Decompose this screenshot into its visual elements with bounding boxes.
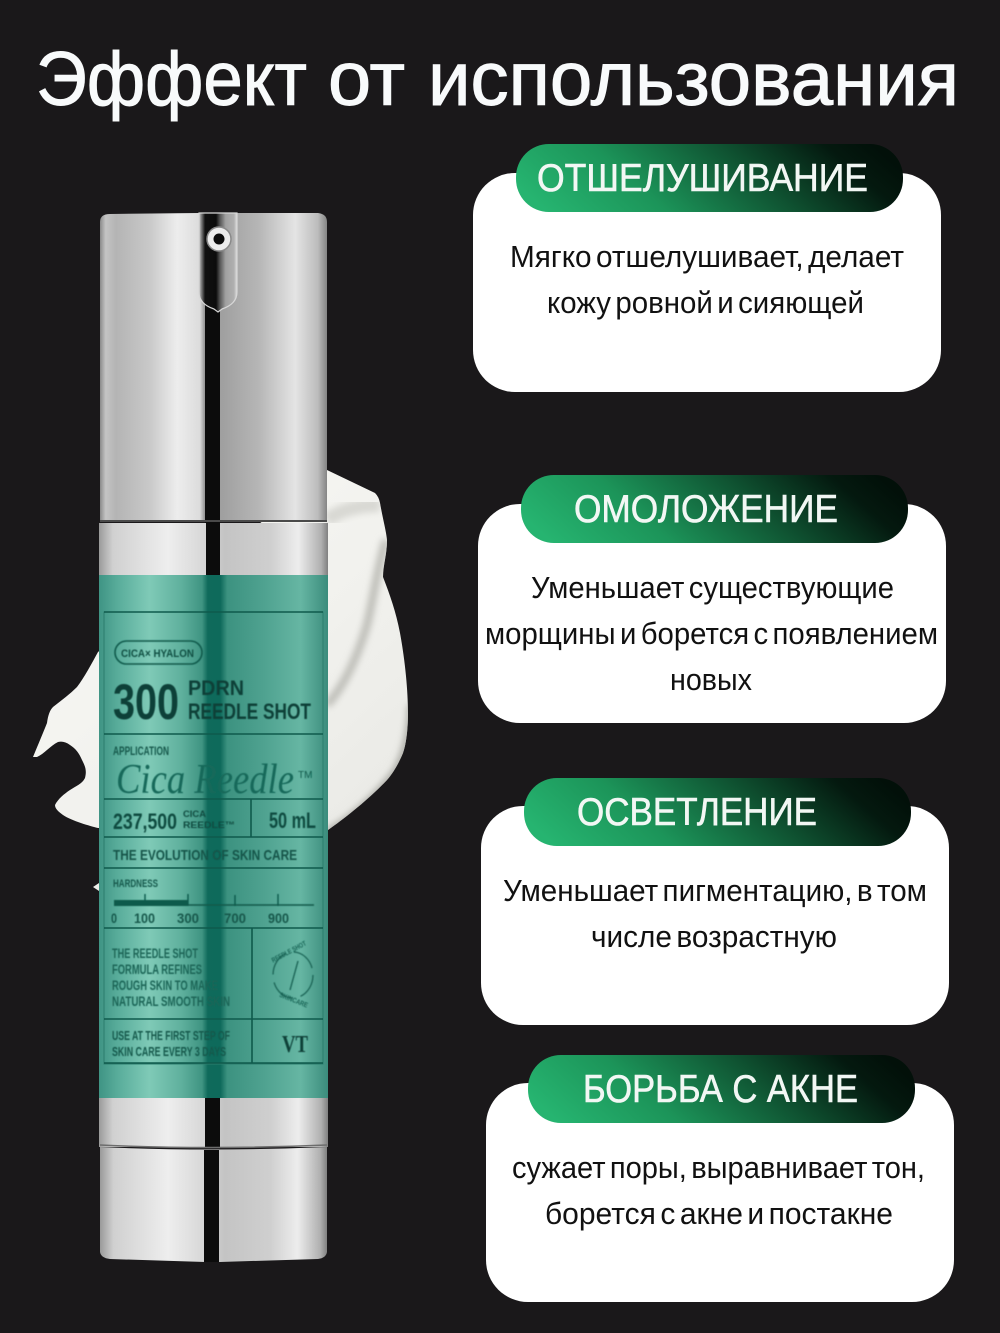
body text — [510, 239, 904, 320]
teal label band — [99, 575, 328, 1100]
panel: brightening — [481, 778, 949, 1025]
heading pill: ОМОЛОЖЕНИЕ — [574, 488, 838, 531]
label: application: TM — [298, 770, 312, 781]
body text: Мягко отшелушивает, делает — [510, 239, 904, 274]
body text: кожу ровной и сияющей — [547, 285, 864, 320]
label: skincare stamp: SKINCARE — [278, 992, 309, 1010]
panel: exfoliation — [473, 144, 941, 392]
body text: числе возрастную — [591, 919, 837, 954]
body text — [503, 873, 927, 954]
body text — [512, 1150, 925, 1231]
card background — [478, 504, 946, 723]
body text — [485, 570, 938, 697]
label: product name: 300 — [113, 674, 179, 730]
label: cica x hyalon badge: CICA× HYALON — [121, 648, 194, 660]
label: description: THE REEDLE SHOT — [112, 946, 199, 961]
label: hardness scale: HARDNESS — [113, 878, 158, 890]
heading pill: ОСВЕТЛЕНИЕ — [577, 791, 817, 834]
label: application: Cica Reedle — [116, 757, 294, 803]
label: skincare stamp: REEDLE SHOT — [271, 940, 308, 964]
label: usage note: SKIN CARE EVERY 3 DAYS — [112, 1045, 226, 1059]
label: quantity and volume: REEDLE™ — [183, 820, 235, 831]
label: cica x hyalon badge — [115, 641, 202, 664]
body text: морщины и борется с появлением — [485, 616, 938, 651]
label: description — [112, 946, 230, 1009]
icon: pump nozzle opening — [207, 227, 231, 251]
heading pill: ОТШЕЛУШИВАНИЕ — [537, 157, 868, 200]
label: skincare stamp — [271, 940, 313, 1010]
heading pill — [516, 144, 903, 212]
label: product name: REEDLE SHOT — [188, 699, 311, 724]
label: application: APPLICATION — [113, 746, 169, 758]
label: product name — [113, 674, 311, 730]
bottle base — [99, 1098, 328, 1262]
bottle cap — [100, 213, 327, 525]
label: quantity and volume — [113, 808, 316, 834]
label: quantity and volume: 237,500 — [113, 809, 177, 834]
product bottle — [99, 213, 328, 1262]
label: hardness scale: 300 — [177, 910, 199, 926]
title: использования — [428, 37, 959, 122]
label: usage note — [112, 1029, 230, 1059]
label: product name: PDRN — [188, 677, 244, 700]
heading pill — [524, 778, 911, 846]
label: hardness scale: 0 — [111, 910, 117, 926]
label: description: FORMULA REFINES — [112, 962, 202, 977]
card background — [473, 173, 941, 392]
card background — [486, 1083, 954, 1302]
body text: Уменьшает пигментацию, в том — [503, 873, 927, 908]
label: tagline: THE EVOLUTION OF SKIN CARE — [113, 847, 297, 864]
label: hardness scale: 900 — [268, 910, 289, 926]
label: hardness scale: 100 — [134, 910, 155, 926]
title — [36, 37, 959, 122]
label: usage note: USE AT THE FIRST STEP OF — [112, 1029, 230, 1043]
label: hardness scale: 700 — [224, 910, 246, 926]
heading pill: БОРЬБА С АКНЕ — [583, 1068, 858, 1111]
cream swatch — [20, 460, 420, 891]
label: hardness scale — [111, 878, 314, 926]
label: quantity and volume: 50 mL — [269, 808, 316, 833]
panel: acne control — [486, 1055, 954, 1302]
panel: rejuvenation — [478, 475, 946, 723]
title: от — [328, 37, 405, 122]
body text: сужает поры, выравнивает тон, — [512, 1150, 925, 1185]
label: description: ROUGH SKIN TO MAKE — [112, 978, 218, 993]
title: Эффект — [36, 37, 307, 122]
label: description: NATURAL SMOOTH SKIN — [112, 994, 230, 1009]
body text: новых — [670, 662, 752, 697]
body text: борется с акне и постакне — [545, 1196, 893, 1231]
body text: Уменьшает существующие — [531, 570, 894, 605]
heading pill — [521, 475, 908, 543]
label: VT logo: VT — [282, 1032, 308, 1058]
card background — [481, 806, 949, 1025]
heading pill — [528, 1055, 915, 1123]
bottle collar — [99, 520, 328, 577]
label: quantity and volume: CICA — [183, 809, 206, 820]
